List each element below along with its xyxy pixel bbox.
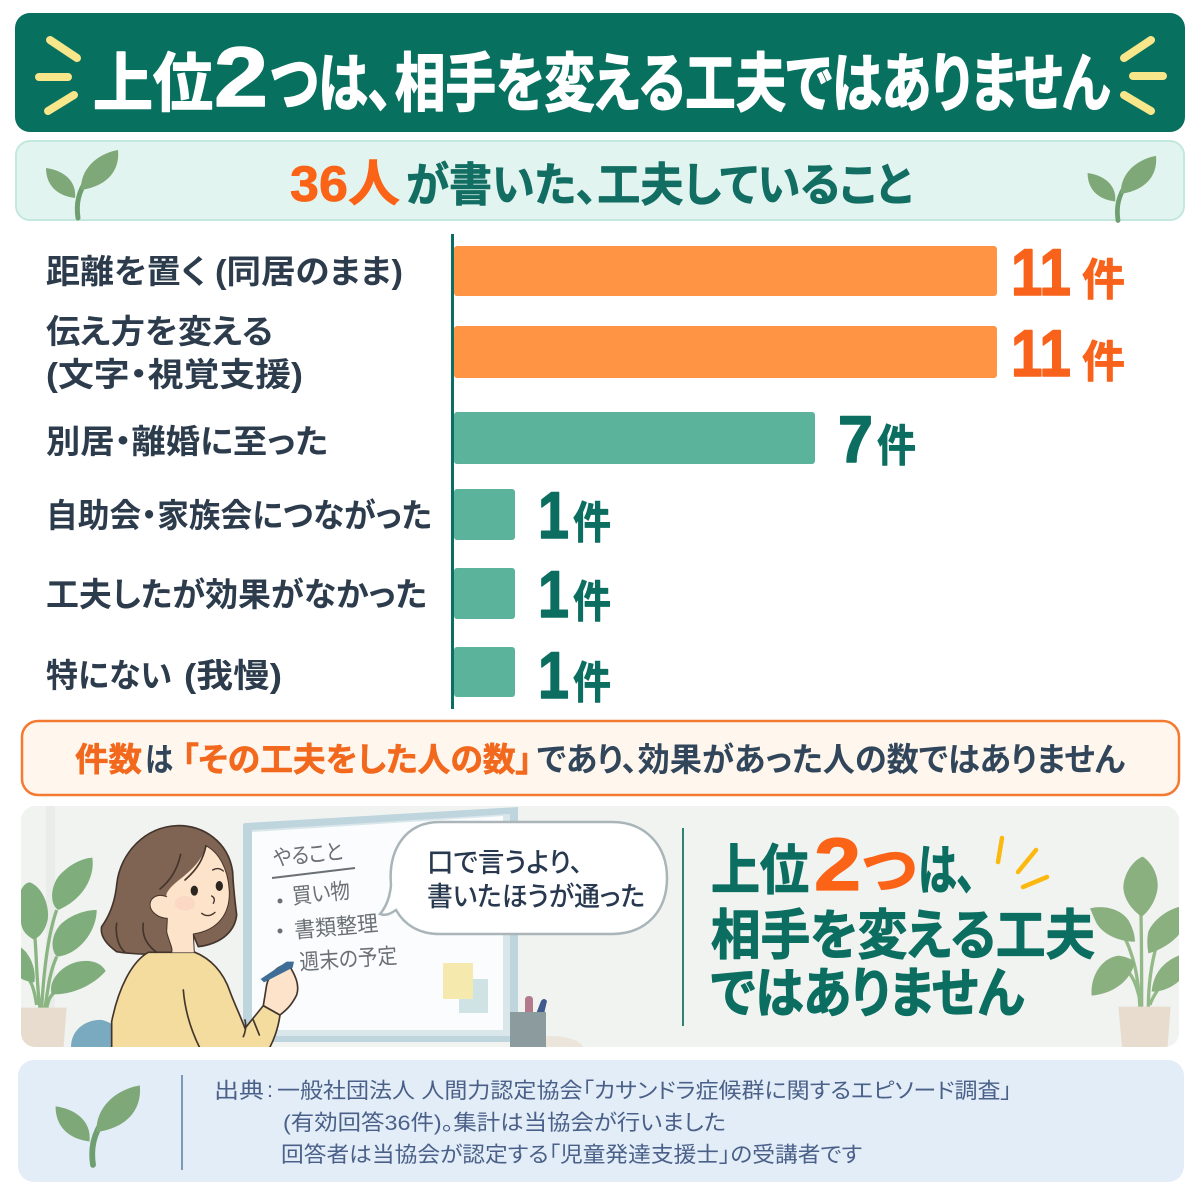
board list: 買い物 [291, 878, 351, 909]
sticky notes [443, 963, 488, 1013]
source text: 回答者は当協会が認定する「児童発達支援士」の受講者です [281, 1143, 862, 1167]
row: 自助会・家族会: 件 [573, 499, 611, 548]
row: 自助会・家族会 [46, 478, 611, 552]
row: 効果がなかった: 工夫したが効果がなかった [46, 576, 427, 613]
icon: right sparkle [1124, 40, 1163, 111]
callout: note on counts: 「その工夫をした人の数」 [182, 741, 532, 778]
hair back [101, 826, 237, 954]
hand with marker [263, 966, 298, 1015]
row: 距離を置く: (同居のまま) [215, 253, 403, 290]
takeaway heading [711, 823, 1095, 1024]
illustration panel [21, 806, 1180, 1064]
row: 自助会・家族会: 1 [538, 478, 569, 552]
icon: right sprout [1088, 156, 1156, 220]
row: 伝え方を変える: 11 [1011, 316, 1071, 390]
source text: 出典 [214, 1079, 264, 1103]
board list [272, 839, 398, 975]
row: 伝え方を変える [46, 313, 1125, 393]
row: 特にない: 件 [573, 659, 611, 708]
row: 伝え方を変える: 伝え方を変える [46, 313, 273, 350]
callout: note on counts: であり、効果があった人の数ではありません [537, 741, 1125, 778]
chart axis [451, 234, 454, 709]
takeaway heading: つ [862, 841, 916, 901]
board list: やること [272, 839, 344, 871]
source text: (有効回答36件)。集計は当協会が行いました [283, 1111, 726, 1135]
row: 距離を置く: 11 [1011, 235, 1071, 309]
callout: note on counts [22, 721, 1179, 795]
callout: note on counts: は [145, 741, 173, 778]
title banner [15, 13, 1185, 132]
title text: 2 [214, 30, 268, 124]
row: 効果がなかった [46, 557, 611, 631]
row: 自助会・家族会: 自助会・家族会につながった [46, 497, 432, 534]
speech bubble: 口で言うより、 [427, 848, 583, 878]
takeaway heading: 上位 [711, 841, 809, 901]
row: 伝え方を変える: 件 [1082, 338, 1125, 387]
board list: 書類整理 [293, 911, 379, 943]
subtitle text: 36人 [290, 156, 400, 212]
row: 効果がなかった: 1 [538, 557, 569, 631]
takeaway heading: 2 [814, 823, 861, 906]
title text: つは、 [270, 48, 393, 120]
right pot [1118, 1007, 1171, 1050]
takeaway heading: 相手を変える工夫 [711, 906, 1095, 966]
row: 伝え方を変える: (文字・視覚支援) [46, 356, 303, 393]
source text: 一般社団法人 人間力認定協会「カサンドラ症候群に関するエピソード調査」 [277, 1079, 1012, 1103]
subtitle text: が書いた、工夫していること [406, 159, 912, 211]
icon: emphasis rays [998, 838, 1047, 887]
subtitle band [16, 141, 1184, 220]
icon: left sparkle [39, 40, 77, 111]
sweater [112, 952, 280, 1050]
row: 別居・離婚: 別居・離婚に至った [46, 423, 328, 460]
row: 別居・離婚: 7 [838, 402, 873, 476]
right plant [1090, 857, 1180, 1050]
row: 効果がなかった: 件 [573, 578, 611, 627]
row: 特にない: 1 [538, 638, 569, 712]
row: 特にない: (我慢) [184, 657, 282, 694]
row: 距離を置く [46, 235, 1125, 309]
pen cup [510, 996, 547, 1048]
title text: 上位 [93, 48, 213, 120]
left plant [21, 858, 106, 1050]
speech bubble: 書いたほうが通った [427, 882, 645, 912]
row: 別居・離婚 [46, 402, 916, 476]
divider [682, 828, 684, 1026]
whiteboard [243, 807, 518, 1042]
bar chart [46, 234, 1125, 712]
row: 距離を置く: 距離を置く [46, 253, 206, 290]
row: 別居・離婚: 件 [877, 422, 916, 471]
callout: note on counts: 件数 [75, 741, 142, 778]
takeaway heading: ではありません [711, 964, 1024, 1024]
icon: left sprout [46, 150, 118, 218]
icon: footer sprout [56, 1085, 140, 1165]
row: 距離を置く: 件 [1082, 256, 1125, 305]
board list: 週末の予定 [299, 943, 398, 975]
takeaway heading: は、 [918, 841, 976, 901]
speech bubble [380, 822, 667, 934]
source text [214, 1078, 1012, 1167]
woman [101, 826, 298, 1050]
source footer [18, 1060, 1184, 1182]
source text: : [267, 1078, 273, 1102]
row: 特にない: 特にない [46, 657, 172, 694]
chair [71, 1020, 111, 1047]
row: 特にない [46, 638, 611, 712]
left pot [21, 1008, 67, 1050]
face and neck [150, 846, 229, 952]
title text [93, 30, 1110, 124]
